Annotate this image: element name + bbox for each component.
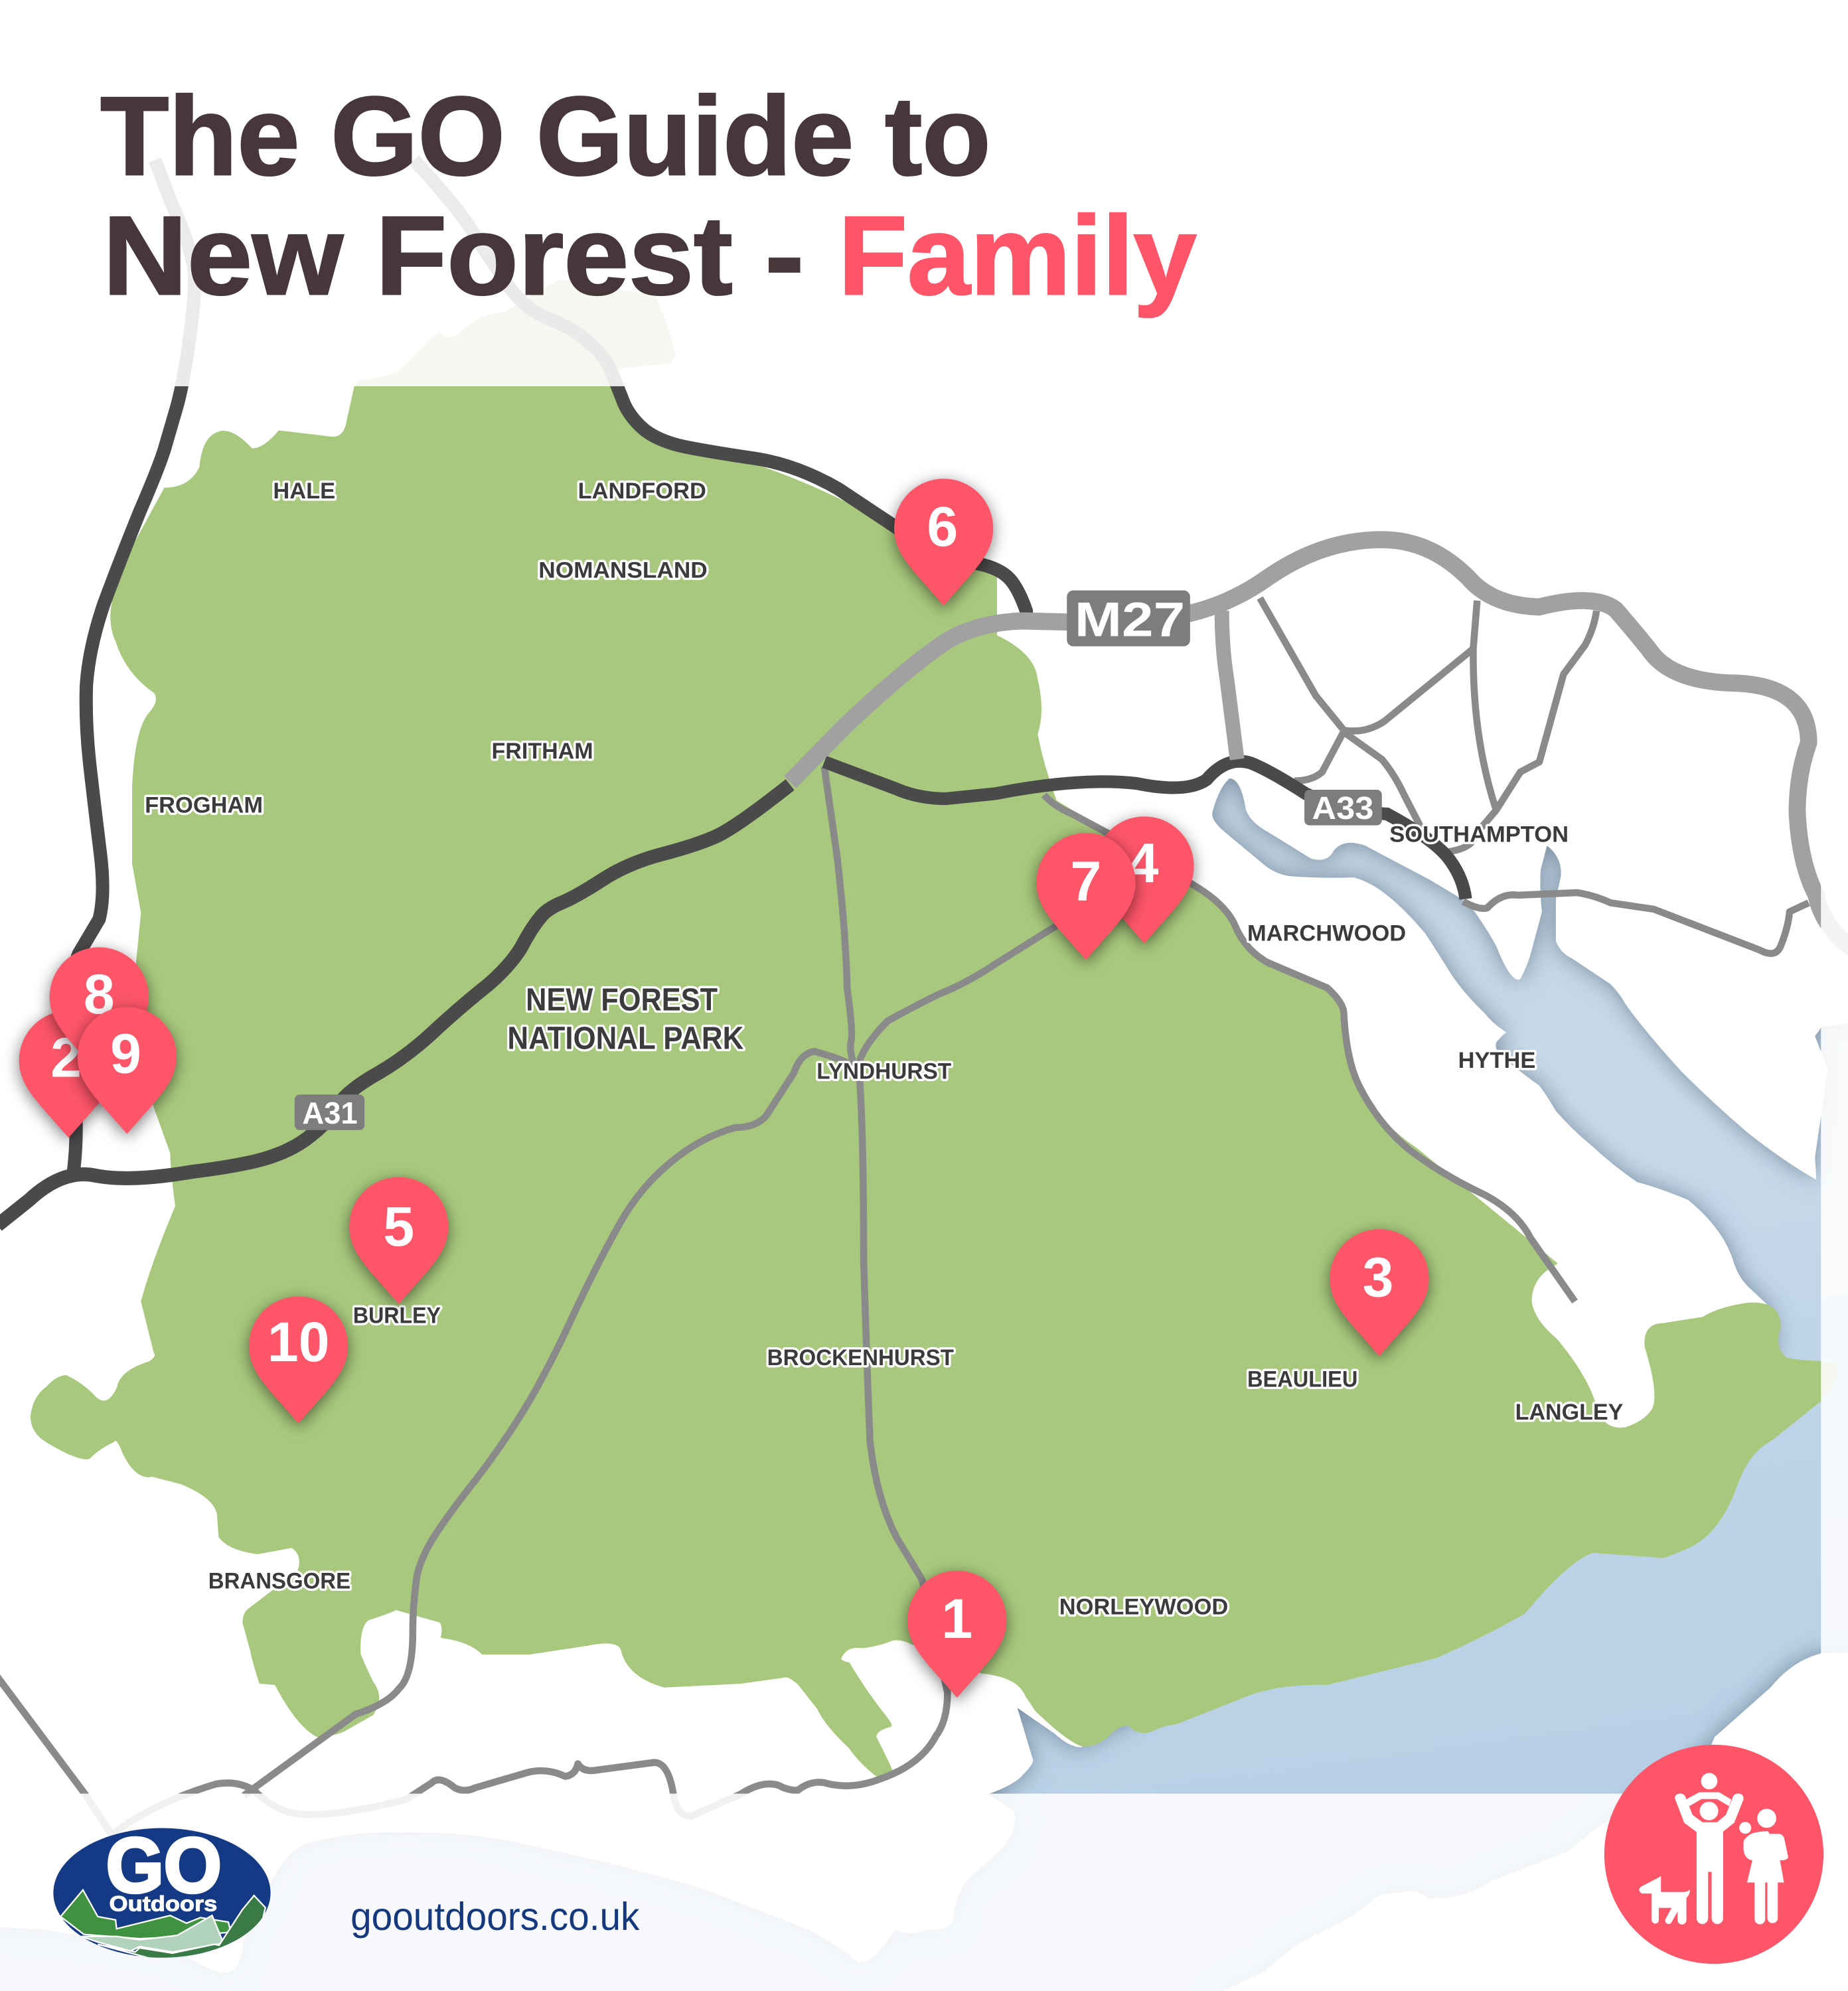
place label: Beaulieu: BEAULIEU (1247, 1366, 1357, 1392)
pin 5: 5 (383, 1195, 414, 1258)
place label: Brockenhurst: BROCKENHURST (767, 1345, 954, 1370)
title (100, 74, 1196, 318)
region label: New Forest National Park (507, 982, 744, 1056)
pin 10: 10 (268, 1311, 329, 1373)
pin 8: 8 (84, 963, 115, 1025)
place label: Fritham: FRITHAM (491, 739, 593, 764)
pin 9: 9 (110, 1023, 141, 1085)
place label: Hythe: HYTHE (1458, 1048, 1535, 1073)
icon: dog (1639, 1876, 1690, 1925)
minor roads (0, 598, 1809, 1835)
pin 2: 2 (50, 1026, 82, 1088)
title: The GO Guide to (100, 74, 990, 198)
pin 6 (894, 479, 993, 606)
pin 4 (1095, 816, 1194, 944)
place label: Southampton: SOUTHAMPTON (1389, 822, 1569, 847)
road sign: M27: M27 (1075, 592, 1185, 647)
place label: Landford: LANDFORD (578, 479, 706, 504)
pin 9 (78, 1007, 177, 1134)
main road: A33 (824, 761, 1466, 899)
forest: New Forest National Park area (32, 386, 1836, 1778)
pin 4: 4 (1128, 832, 1159, 895)
map (0, 386, 1821, 1794)
region label: New Forest National Park: NATIONAL PARK (507, 1021, 744, 1056)
pin 6: 6 (927, 496, 958, 558)
main road: northern A-road (414, 160, 1026, 623)
road sign: A33: A33 (1312, 791, 1373, 826)
logo: GO Outdoors: GO (106, 1822, 222, 1909)
water: Southampton Water and the Solent (0, 778, 1848, 1991)
title: Family (838, 193, 1196, 318)
pin 10 (249, 1296, 348, 1424)
pin 3: 3 (1363, 1246, 1393, 1308)
main road: A-road running north to south on the west side (68, 160, 194, 1171)
place label: Langley: LANGLEY (1515, 1400, 1623, 1425)
title: New Forest - (103, 193, 804, 318)
motorway: M271 spur (1222, 611, 1237, 759)
pin 1: 1 (941, 1587, 972, 1650)
website address: gooutdoors.co.uk (350, 1894, 640, 1939)
pin 8 (50, 947, 149, 1074)
place label: Frogham: FROGHAM (145, 792, 263, 818)
place label: Hale: HALE (273, 479, 335, 504)
pin 2 (19, 1011, 118, 1138)
pin 7 (1036, 833, 1136, 960)
region label: New Forest National Park: NEW FOREST (526, 982, 718, 1017)
icon: mother and baby (1739, 1808, 1788, 1924)
logo: GO Outdoors (53, 1822, 271, 1962)
icon: parent (1675, 1793, 1744, 1924)
forest: northern edge beyond the map frame (353, 279, 676, 394)
place label: Norleywood: NORLEYWOOD (1059, 1595, 1228, 1620)
place label: Burley: BURLEY (353, 1303, 441, 1329)
place label: Bransgore: BRANSGORE (208, 1568, 350, 1593)
logo: GO Outdoors: Outdoors (110, 1891, 217, 1915)
motorway: M27 (790, 540, 1848, 950)
road sign: A31: A31 (302, 1096, 358, 1130)
icon: family badge (1604, 1745, 1823, 1964)
main road: A31 (0, 784, 790, 1225)
pin 3 (1330, 1229, 1429, 1356)
place label: Nomansland: NOMANSLAND (538, 558, 708, 583)
place label: Marchwood: MARCHWOOD (1247, 921, 1406, 946)
pin 5 (349, 1177, 448, 1304)
place label: Lyndhurst: LYNDHURST (816, 1059, 951, 1084)
pin 7: 7 (1071, 850, 1101, 913)
pin 1 (907, 1571, 1006, 1698)
icon: child on shoulders (1686, 1773, 1731, 1806)
